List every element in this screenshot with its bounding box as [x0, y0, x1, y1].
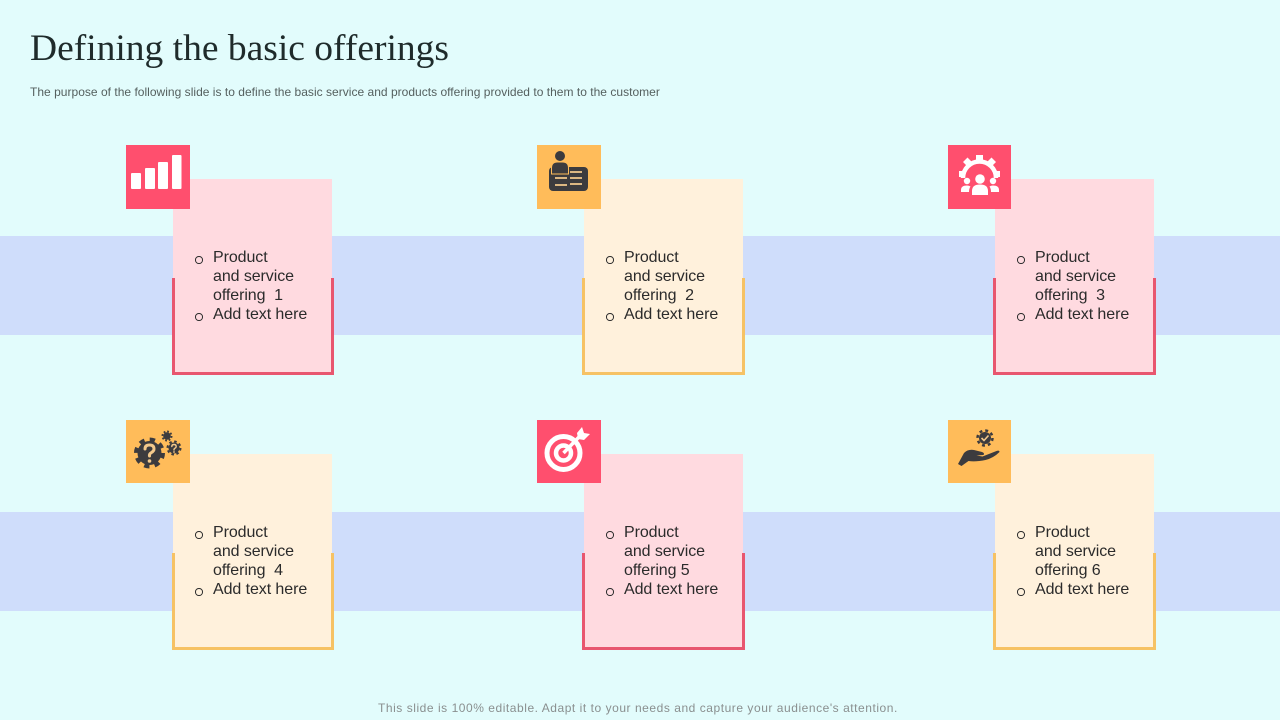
panel: offering 3: [948, 145, 1156, 375]
offering text: Product: [624, 524, 679, 541]
offering text: Product: [213, 249, 268, 266]
offering text: [1017, 524, 1129, 598]
offering text: and service: [624, 268, 705, 285]
footer note: This slide is 100% editable. Adapt it to your needs and capture your audience's attention.: [378, 701, 898, 715]
offering text: Add text here: [1035, 306, 1129, 323]
offering text: Add text here: [213, 306, 307, 323]
band: top row: [0, 236, 1280, 335]
icon: gears with question marks: [126, 420, 190, 483]
panel: offering 5: [537, 420, 745, 650]
card frame: [172, 553, 334, 650]
offering text: offering 2: [624, 287, 694, 304]
card background: [995, 179, 1154, 373]
card background: [584, 179, 743, 373]
card frame: [993, 278, 1156, 375]
card frame: [582, 278, 745, 375]
icon: target with arrow: [537, 420, 601, 483]
icon: hand holding badge: [948, 420, 1011, 483]
offering text: Add text here: [1035, 581, 1129, 598]
card frame: [172, 278, 334, 375]
panel: offering 6: [948, 420, 1156, 650]
card background: [173, 179, 332, 373]
offering text: offering 3: [1035, 287, 1105, 304]
card background: [584, 454, 743, 648]
panel: offering 1: [126, 145, 334, 375]
offering text: [195, 249, 307, 323]
offering text: Product: [213, 524, 268, 541]
icon: gear with team: [948, 145, 1011, 209]
offering text: [1017, 249, 1129, 323]
offering text: offering 4: [213, 562, 283, 579]
offering text: and service: [1035, 543, 1116, 560]
offering text: offering 1: [213, 287, 283, 304]
offering text: and service: [213, 543, 294, 560]
panel: offering 4: [126, 420, 334, 650]
subtitle: The purpose of the following slide is to define the basic service and products offering provided to them to the customer: [30, 85, 660, 99]
offering text: [195, 524, 307, 598]
offering text: Product: [624, 249, 679, 266]
offering text: offering 6: [1035, 562, 1101, 579]
icon: bar chart: [126, 145, 190, 209]
icon: person with id card: [537, 145, 601, 209]
offering text: Product: [1035, 249, 1090, 266]
title: Defining the basic offerings: [30, 28, 449, 69]
card frame: [993, 553, 1156, 650]
card background: [995, 454, 1154, 648]
card background: [173, 454, 332, 648]
offering text: Add text here: [213, 581, 307, 598]
offering text: Product: [1035, 524, 1090, 541]
offering text: [606, 249, 718, 323]
offering text: and service: [1035, 268, 1116, 285]
band: bottom row: [0, 512, 1280, 611]
panel: offering 2: [537, 145, 745, 375]
offering text: Add text here: [624, 581, 718, 598]
offering text: [606, 524, 718, 598]
card frame: [582, 553, 745, 650]
offering text: Add text here: [624, 306, 718, 323]
offering text: and service: [624, 543, 705, 560]
offering text: and service: [213, 268, 294, 285]
offering text: offering 5: [624, 562, 690, 579]
